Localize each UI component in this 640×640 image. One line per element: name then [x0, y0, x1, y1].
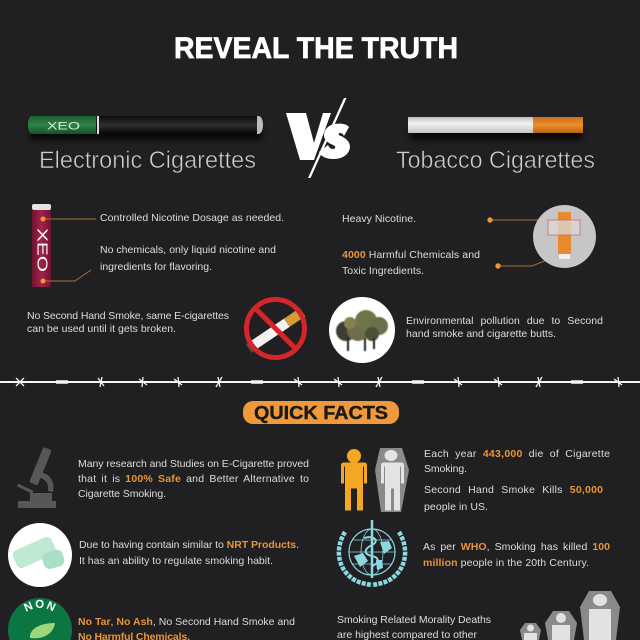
text: environmental pollution: hand smoke and cigarette butts. — [406, 328, 556, 340]
text: WHO — [423, 541, 610, 569]
text: research: Cigarette Smoking. — [78, 488, 166, 500]
title: REVEAL THE TRUTH — [174, 32, 458, 65]
barbed wire divider — [0, 377, 640, 387]
text: research: that it is 100% Safe and Better Alternative to — [78, 473, 309, 485]
panel: electronic cigarette header — [28, 116, 263, 174]
icon: microscope — [17, 447, 56, 508]
panel: mortality fact — [337, 591, 620, 640]
text: NRT: Due to having contain similar to NRT Products. — [79, 539, 299, 551]
text: deaths per year: people in US. — [424, 501, 488, 513]
text: research — [78, 458, 309, 500]
text: mortality: Smoking Related Morality Deaths — [337, 614, 491, 626]
text: no second hand smoke: can be used until it gets broken. — [27, 323, 176, 335]
text: no tar — [78, 616, 295, 640]
text: mortality — [337, 614, 491, 640]
text: deaths per year: Second Hand Smoke Kills 50,000 — [424, 484, 603, 496]
panel: tobacco drawbacks — [329, 205, 603, 363]
text: harmful chemicals: Toxic Ingredients. — [342, 265, 424, 277]
text: no chemicals — [100, 244, 276, 273]
text: harmful chemicals — [342, 249, 480, 277]
text: NRT: It has an ability to regulate smoking habit. — [79, 555, 273, 567]
icon: electronic cigarette — [28, 116, 263, 140]
icon: coffins — [520, 591, 620, 640]
text: harmful chemicals: 4000 Harmful Chemicals and — [342, 249, 480, 261]
icon: trees in circle — [329, 297, 395, 363]
text: research: Many research and Studies on E-Cigarette proved — [78, 458, 309, 470]
text: deaths per year — [424, 448, 610, 513]
text: no second hand smoke — [27, 310, 229, 335]
icon: WHO emblem — [339, 520, 405, 585]
heading: tobacco cigarettes: Tobacco Cigarettes — [396, 147, 595, 174]
panel: e-cigarette benefits — [27, 204, 305, 358]
section heading: quick facts — [243, 401, 399, 424]
text: no tar: No Tar, No Ash, No Second Hand Smoke and — [78, 616, 295, 628]
text: environmental pollution: Environmental pollution due to Second — [406, 315, 603, 327]
text: WHO: As per WHO, Smoking has killed 100 — [423, 541, 610, 553]
panel: NRT fact — [8, 523, 299, 587]
text: deaths per year: Each year 443,000 die of Cigarette — [424, 448, 610, 460]
text: controlled nicotine: Controlled Nicotine Dosage as needed. — [100, 212, 284, 224]
panel: WHO fact — [339, 520, 610, 585]
text: heavy nicotine: Heavy Nicotine. — [342, 213, 416, 225]
icon: cigarette butt in circle — [487, 205, 596, 269]
panel: death statistics — [341, 448, 610, 513]
icon: electronic cigarette: XEO — [47, 120, 81, 132]
text: deaths per year: Smoking. — [424, 463, 467, 475]
icon: nicotine gum — [8, 523, 72, 587]
text: no chemicals: No chemicals, only liquid nicotine and — [100, 244, 276, 256]
icon: red e-cigarette: XEO — [34, 228, 50, 272]
text: no chemicals: ingredients for flavoring. — [100, 261, 212, 273]
icon: tobacco cigarette — [408, 117, 583, 140]
text: WHO: million people in the 20th Century. — [423, 557, 589, 569]
heading: electronic cigarettes: Electronic Cigarettes — [39, 147, 256, 174]
icon: person and coffin — [341, 448, 409, 512]
text: NRT — [79, 539, 299, 567]
panel: research fact — [17, 447, 309, 508]
text: no second hand smoke: No Second Hand Smoke, same E-cigarettes — [27, 310, 229, 322]
section heading: quick facts: QUICK FACTS — [254, 403, 388, 423]
icon: red e-cigarette — [32, 204, 96, 287]
icon: non tobacco badge: NON — [24, 600, 56, 612]
icon: versus mark — [286, 98, 350, 178]
panel: no tar fact — [8, 598, 295, 640]
panel: tobacco cigarette header — [396, 117, 595, 174]
text: environmental pollution — [406, 315, 603, 340]
icon: non tobacco badge — [8, 598, 72, 640]
icon: no smoking sign — [246, 300, 305, 358]
